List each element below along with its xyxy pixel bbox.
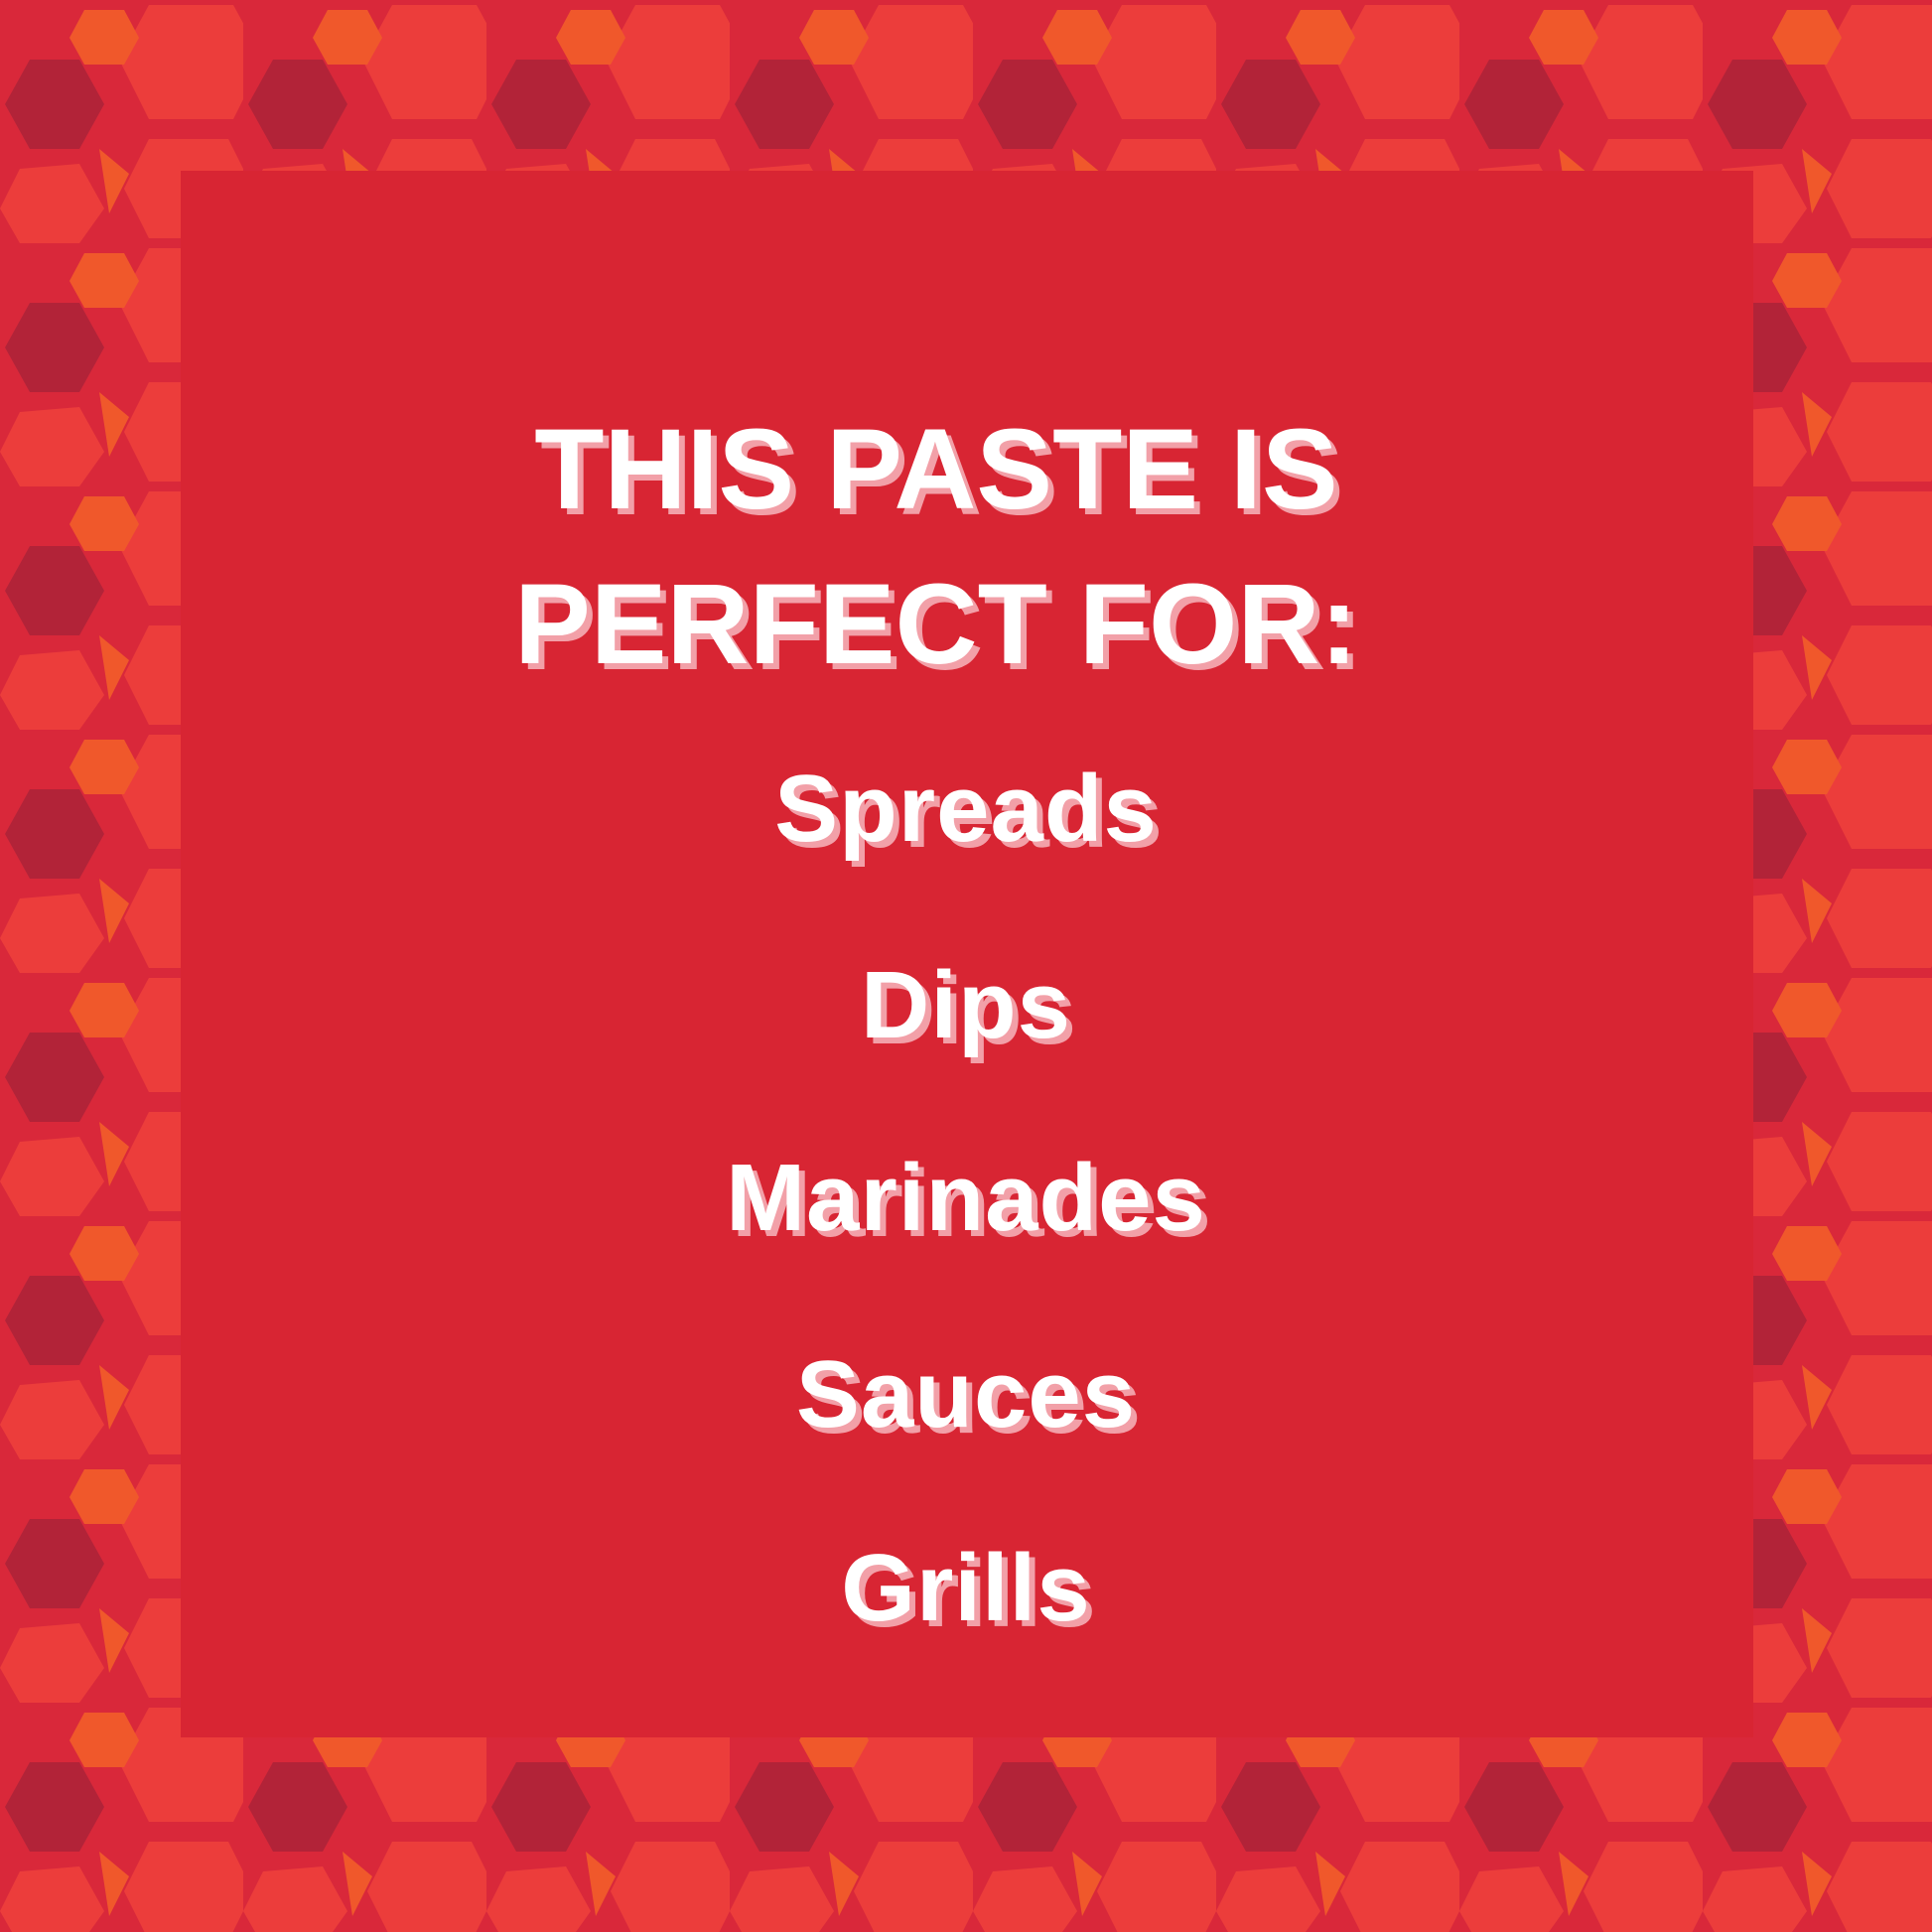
title [514,406,1358,688]
list item: Spreads: Spreads [774,756,1158,862]
title: PERFECT FOR: [514,561,1358,688]
list item: Marinades: Marinades [726,1145,1206,1251]
title: THIS PASTE IS [534,406,1338,533]
list item: Grills: Grills [841,1535,1091,1641]
list item: Dips: Dips [861,952,1071,1058]
panel: central red square [181,171,1753,1737]
list item: Sauces: Sauces [796,1341,1136,1448]
